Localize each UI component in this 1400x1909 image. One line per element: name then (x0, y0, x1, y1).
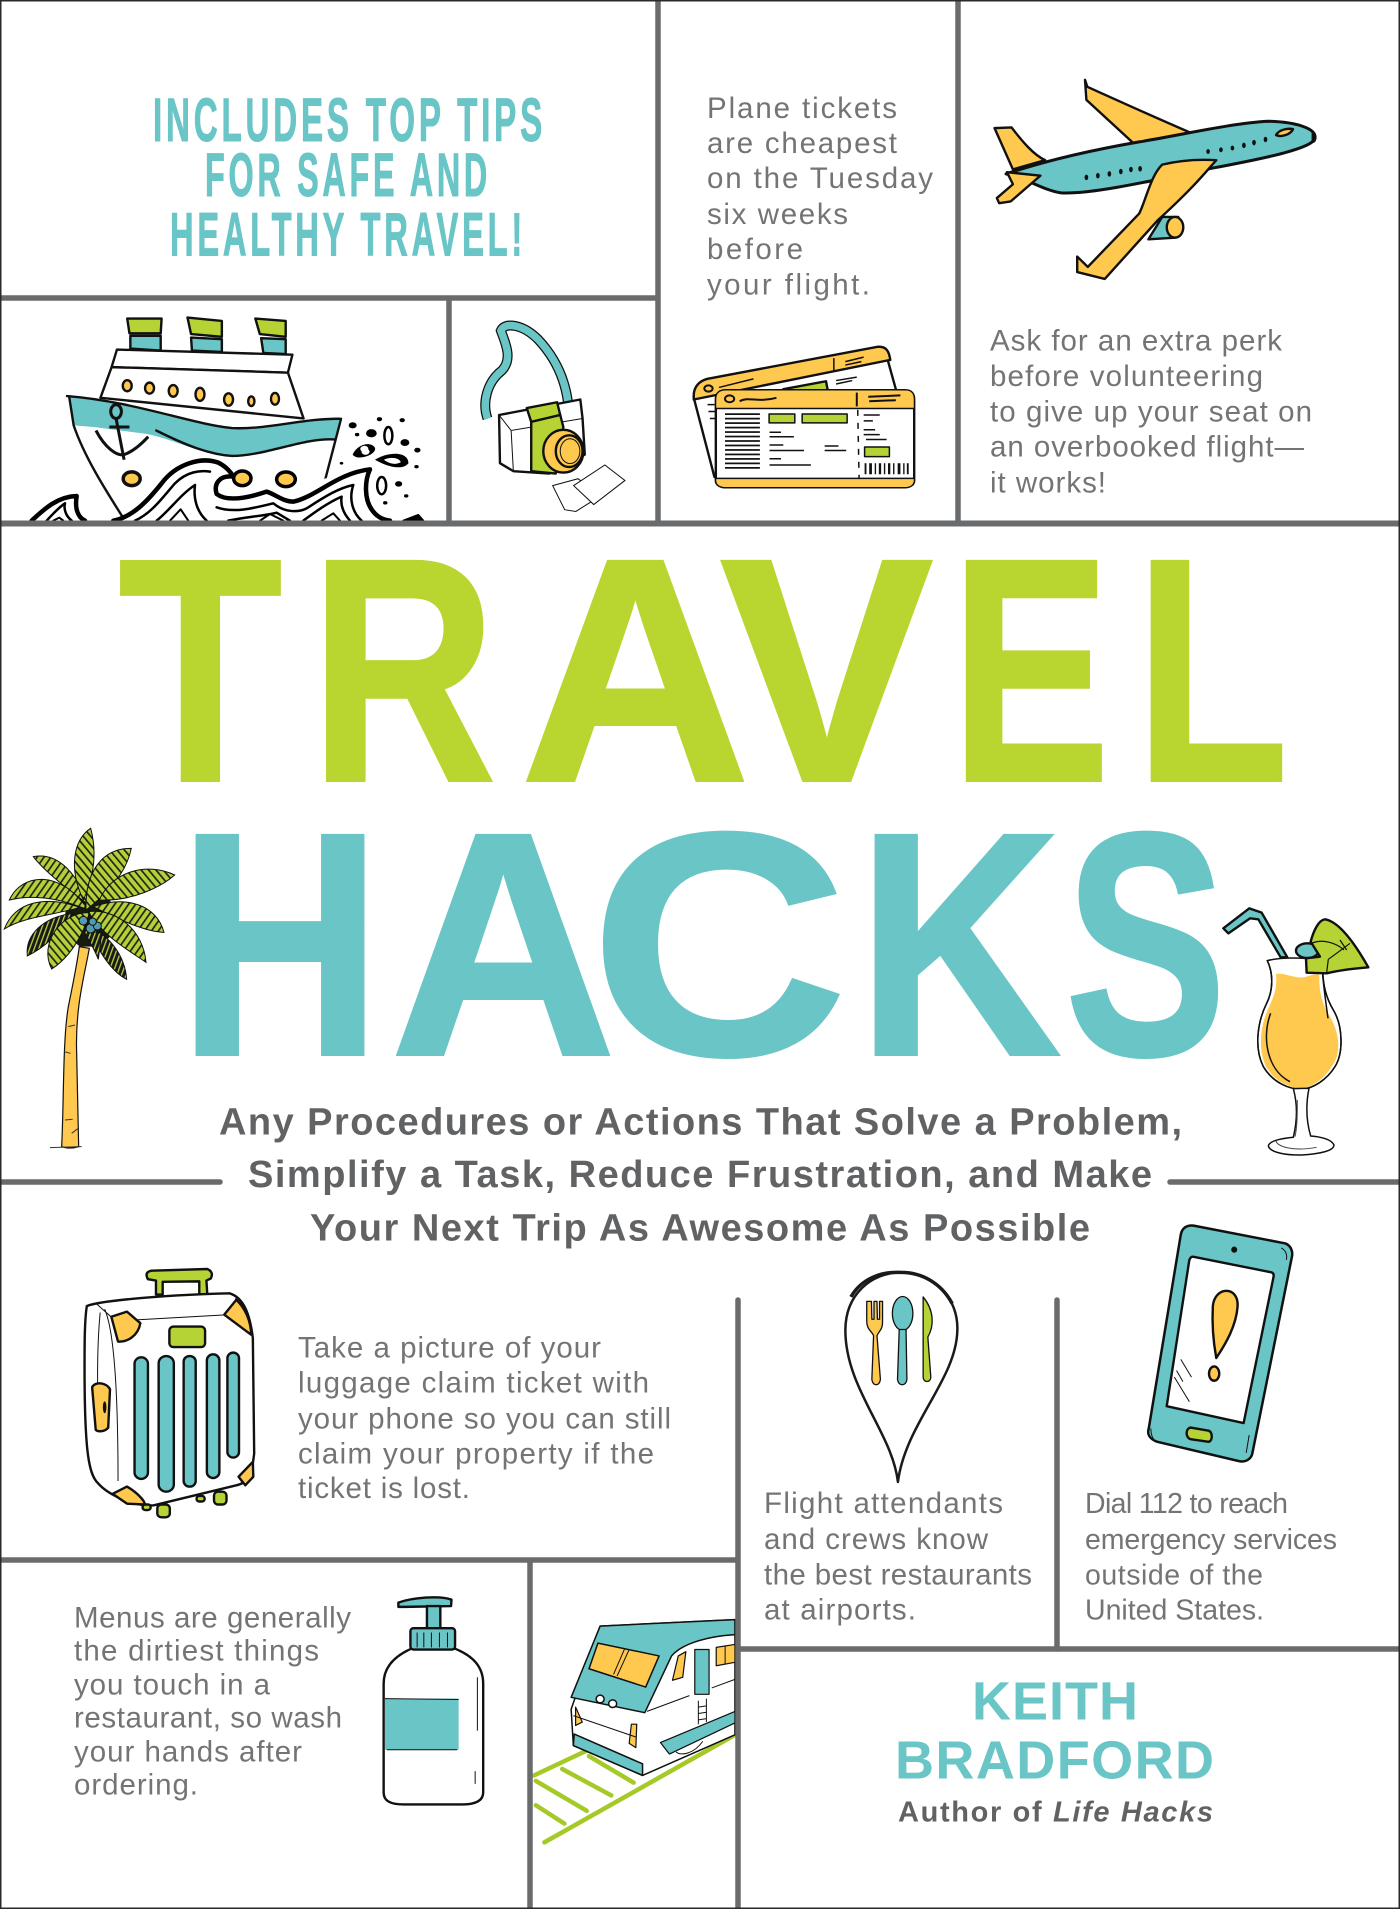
subtitle (219, 1102, 1182, 1250)
text block: menus tip (74, 1602, 351, 1802)
icon: ship waves (32, 461, 423, 521)
text block: plane tickets tip: are cheapest (707, 127, 897, 160)
icon: train on tracks (534, 1620, 735, 1842)
subtitle: Any Procedures or Actions That Solve a Problem, (219, 1102, 1182, 1144)
tagline: includes top tips: FOR SAFE AND (205, 141, 491, 209)
text block: extra perk tip (990, 324, 1312, 500)
text block: flight attendants tip: the best restaurants (764, 1558, 1032, 1592)
icon: camera (485, 325, 625, 511)
text block: emergency number tip: United States. (1085, 1594, 1264, 1626)
text block: menus tip: the dirtiest things (74, 1634, 319, 1668)
text block: extra perk tip: Ask for an extra perk (990, 324, 1282, 358)
author credit (895, 1672, 1214, 1828)
text block: luggage ticket tip: ticket is lost. (298, 1472, 470, 1505)
icon: cocktail glass (1223, 908, 1368, 1155)
text block: extra perk tip: an overbooked flight— (990, 430, 1304, 464)
text block: flight attendants tip: at airports. (764, 1594, 916, 1626)
icon: soap bottle (384, 1597, 483, 1804)
text block: extra perk tip: to give up your seat on (990, 396, 1312, 428)
title: HACKS: S (1064, 767, 1226, 1122)
text block: plane tickets tip: on the Tuesday (707, 162, 933, 195)
icon: airplane (995, 80, 1315, 279)
title: HACKS: C (590, 767, 848, 1122)
text block: flight attendants tip: Flight attendants (764, 1487, 1003, 1520)
subtitle: Your Next Trip As Awesome As Possible (310, 1208, 1090, 1250)
text block: plane tickets tip (707, 92, 933, 302)
icon: camera film prints (553, 465, 625, 511)
text block: flight attendants tip: and crews know (764, 1523, 989, 1556)
icon: plane tickets (694, 347, 914, 487)
text block: luggage ticket tip: claim your property if the (298, 1438, 654, 1470)
title: TRAVEL: T (117, 491, 284, 851)
text block: luggage ticket tip (298, 1332, 671, 1505)
author credit: KEITH (972, 1672, 1138, 1732)
text block: luggage ticket tip: luggage claim ticket with (298, 1366, 649, 1400)
text block: emergency number tip: emergency services (1085, 1524, 1337, 1556)
icon: palm tree (4, 828, 175, 1148)
text block: plane tickets tip: six weeks (707, 198, 848, 231)
subtitle: Simplify a Task, Reduce Frustration, and Make (248, 1154, 1152, 1196)
text block: plane tickets tip: Plane tickets (707, 92, 897, 125)
text block: emergency number tip: Dial 112 to reach (1085, 1488, 1288, 1520)
title: TRAVEL: V (720, 493, 933, 849)
title: HACKS (178, 767, 1226, 1122)
text block: extra perk tip: before volunteering (990, 360, 1263, 393)
title: TRAVEL: L (1135, 493, 1288, 849)
text block: emergency number tip: outside of the (1085, 1560, 1263, 1592)
icon: suitcase (85, 1269, 254, 1517)
title: TRAVEL (117, 491, 1288, 851)
text block: menus tip: you touch in a (74, 1668, 271, 1702)
icon: restaurant map pin (845, 1272, 957, 1482)
icon: cruise ship (32, 318, 423, 521)
author credit: Author of Life Hacks (898, 1796, 1213, 1828)
text block: emergency number tip (1085, 1488, 1337, 1626)
text block: plane tickets tip: before (707, 233, 803, 266)
text block: luggage ticket tip: your phone so you can still (298, 1402, 671, 1436)
tagline: includes top tips: HEALTHY TRAVEL! (170, 200, 526, 268)
text block: menus tip: ordering. (74, 1768, 198, 1802)
title: HACKS: A (390, 767, 617, 1122)
tagline: includes top tips (153, 86, 546, 268)
title: TRAVEL: A (520, 493, 751, 849)
text block: menus tip: your hands after (74, 1736, 302, 1768)
text block: plane tickets tip: your flight. (707, 268, 870, 302)
title: TRAVEL: E (950, 493, 1110, 849)
title: HACKS: K (857, 767, 1061, 1122)
text block: extra perk tip: it works! (990, 466, 1106, 500)
tagline: includes top tips: INCLUDES TOP TIPS (153, 86, 546, 154)
icon: smartphone with alert (1148, 1225, 1292, 1461)
text block: flight attendants tip (764, 1487, 1032, 1626)
text block: menus tip: Menus are generally (74, 1602, 351, 1634)
author credit: BRADFORD (895, 1730, 1214, 1790)
text block: luggage ticket tip: Take a picture of your (298, 1332, 601, 1364)
text block: menus tip: restaurant, so wash (74, 1702, 342, 1734)
title: TRAVEL: R (310, 493, 496, 849)
title: HACKS: H (178, 767, 382, 1122)
icon: water splash (340, 417, 421, 505)
